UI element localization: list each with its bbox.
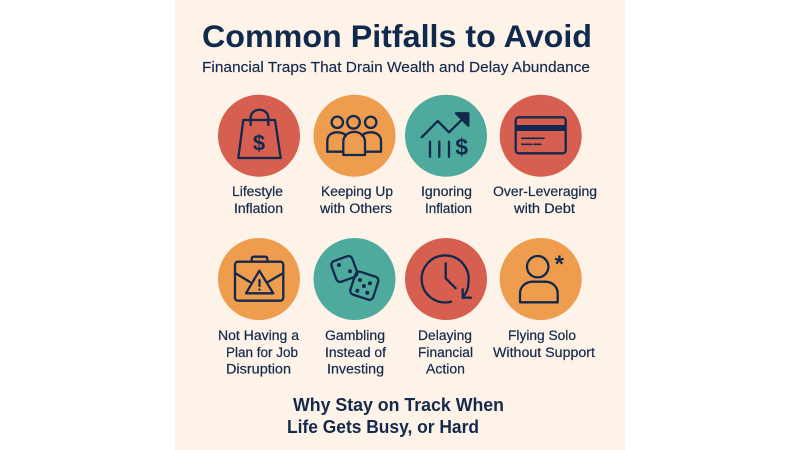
icon: dice — [330, 255, 379, 301]
label: Inflation — [425, 201, 472, 216]
label: Flying Solo — [508, 328, 576, 343]
label: Inflation — [234, 201, 283, 216]
label: Not Having a — [218, 328, 300, 343]
label — [218, 328, 300, 376]
item: Delaying Financial Action — [405, 238, 487, 376]
label: Lifestyle — [232, 184, 283, 199]
icon: person with asterisk: * — [555, 251, 565, 278]
icon: clock with arrow — [422, 255, 471, 302]
subtitle: Financial Traps That Drain Wealth and Delay Abundance — [202, 59, 590, 76]
icon: briefcase with warning — [235, 257, 283, 301]
label — [232, 184, 283, 216]
label: Disruption — [226, 362, 291, 376]
icon: three people — [327, 116, 381, 155]
label — [418, 328, 473, 376]
label: with Others — [319, 201, 392, 216]
item: Not Having a Plan for Job Disruption — [218, 238, 300, 376]
label: Action — [426, 362, 465, 376]
label: Keeping Up — [321, 184, 393, 199]
item: Lifestyle Inflation — [218, 95, 300, 216]
title: Common Pitfalls to Avoid — [202, 18, 592, 54]
item: Over-Leveraging with Debt — [493, 95, 597, 216]
label: Without Support — [493, 345, 595, 360]
item: Flying Solo Without Support — [493, 238, 595, 360]
label — [421, 184, 472, 216]
icon: shopping bag with dollar: $ — [253, 130, 265, 156]
closing heading: Why Stay on Track When — [293, 395, 504, 415]
icon: rising chart with dollar: $ — [455, 134, 468, 160]
label: Financial — [418, 345, 473, 360]
panel: cream background — [175, 0, 625, 450]
closing heading: Life Gets Busy, or Hard — [287, 417, 479, 437]
label: Ignoring — [421, 184, 472, 199]
closing heading — [287, 395, 504, 437]
label: Instead of — [325, 345, 386, 360]
label: Over-Leveraging — [493, 184, 597, 199]
label — [325, 328, 386, 376]
label — [319, 184, 393, 216]
label: Delaying — [418, 328, 472, 343]
item: Gambling Instead of Investing — [314, 238, 396, 376]
label — [493, 184, 597, 216]
label — [493, 328, 595, 360]
label: Plan for Job — [226, 345, 298, 360]
label: with Debt — [513, 201, 575, 216]
item: Ignoring Inflation — [405, 95, 487, 216]
label: Gambling — [325, 328, 385, 343]
icon: credit card — [516, 117, 566, 153]
label: Investing — [327, 362, 384, 376]
item: Keeping Up with Others — [314, 95, 396, 216]
